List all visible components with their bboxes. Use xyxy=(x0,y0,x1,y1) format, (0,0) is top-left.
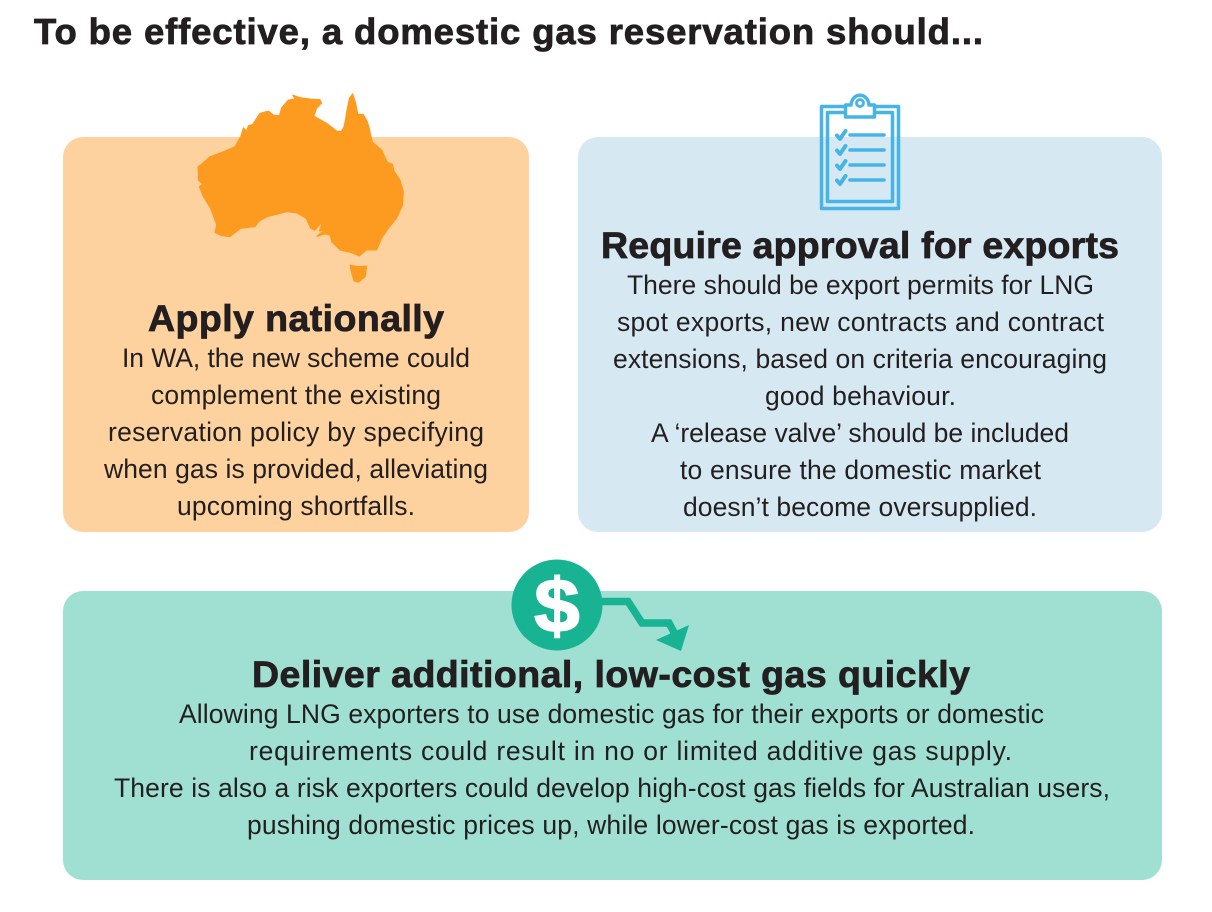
text block: require approval: extensions, based on criteria encouraging xyxy=(613,344,1107,374)
text block: apply nationally: upcoming shortfalls. xyxy=(177,491,415,521)
text block: deliver additional gas xyxy=(114,699,1110,840)
text block: apply nationally: when gas is provided, alleviating xyxy=(103,454,488,484)
heading: apply nationally: Apply nationally xyxy=(148,297,444,339)
text block: require approval: to ensure the domestic market xyxy=(680,455,1042,485)
text block: deliver additional gas: requirements could result in no or limited additive gas supply. xyxy=(249,736,1012,766)
text block: deliver additional gas: Allowing LNG exporters to use domestic gas for their exports or domestic xyxy=(179,699,1044,729)
text block: require approval: spot exports, new contracts and contract xyxy=(617,307,1105,337)
text block: apply nationally: In WA, the new scheme could xyxy=(122,343,470,373)
heading: deliver additional gas: Deliver additional, low-cost gas quickly xyxy=(252,653,970,695)
text block: deliver additional gas: There is also a risk exporters could develop high-cost gas fields for Australian users, xyxy=(114,773,1110,803)
text block: apply nationally: reservation policy by specifying xyxy=(108,417,484,447)
text block: require approval: A ‘release valve’ should be included xyxy=(651,418,1069,448)
panel: apply nationally xyxy=(63,94,529,532)
title: To be effective, a domestic gas reservation should... xyxy=(34,11,983,52)
text block: deliver additional gas: pushing domestic prices up, while lower-cost gas is exported. xyxy=(247,810,975,840)
text block: apply nationally xyxy=(103,343,488,521)
text block: apply nationally: complement the existing xyxy=(151,380,441,410)
icon: dollar with falling arrow: $ xyxy=(534,563,580,648)
panel: require approval for exports xyxy=(578,95,1162,532)
text block: require approval: There should be export permits for LNG xyxy=(627,270,1094,300)
heading: require approval: Require approval for exports xyxy=(601,224,1119,266)
icon: dollar with falling arrow xyxy=(512,560,689,651)
text block: require approval xyxy=(613,270,1107,522)
icon: clipboard checklist xyxy=(822,95,898,208)
icon: map of Australia xyxy=(198,94,403,282)
text block: require approval: doesn’t become oversupplied. xyxy=(683,492,1037,522)
text block: require approval: good behaviour. xyxy=(765,381,956,411)
panel: deliver additional gas xyxy=(63,560,1162,880)
